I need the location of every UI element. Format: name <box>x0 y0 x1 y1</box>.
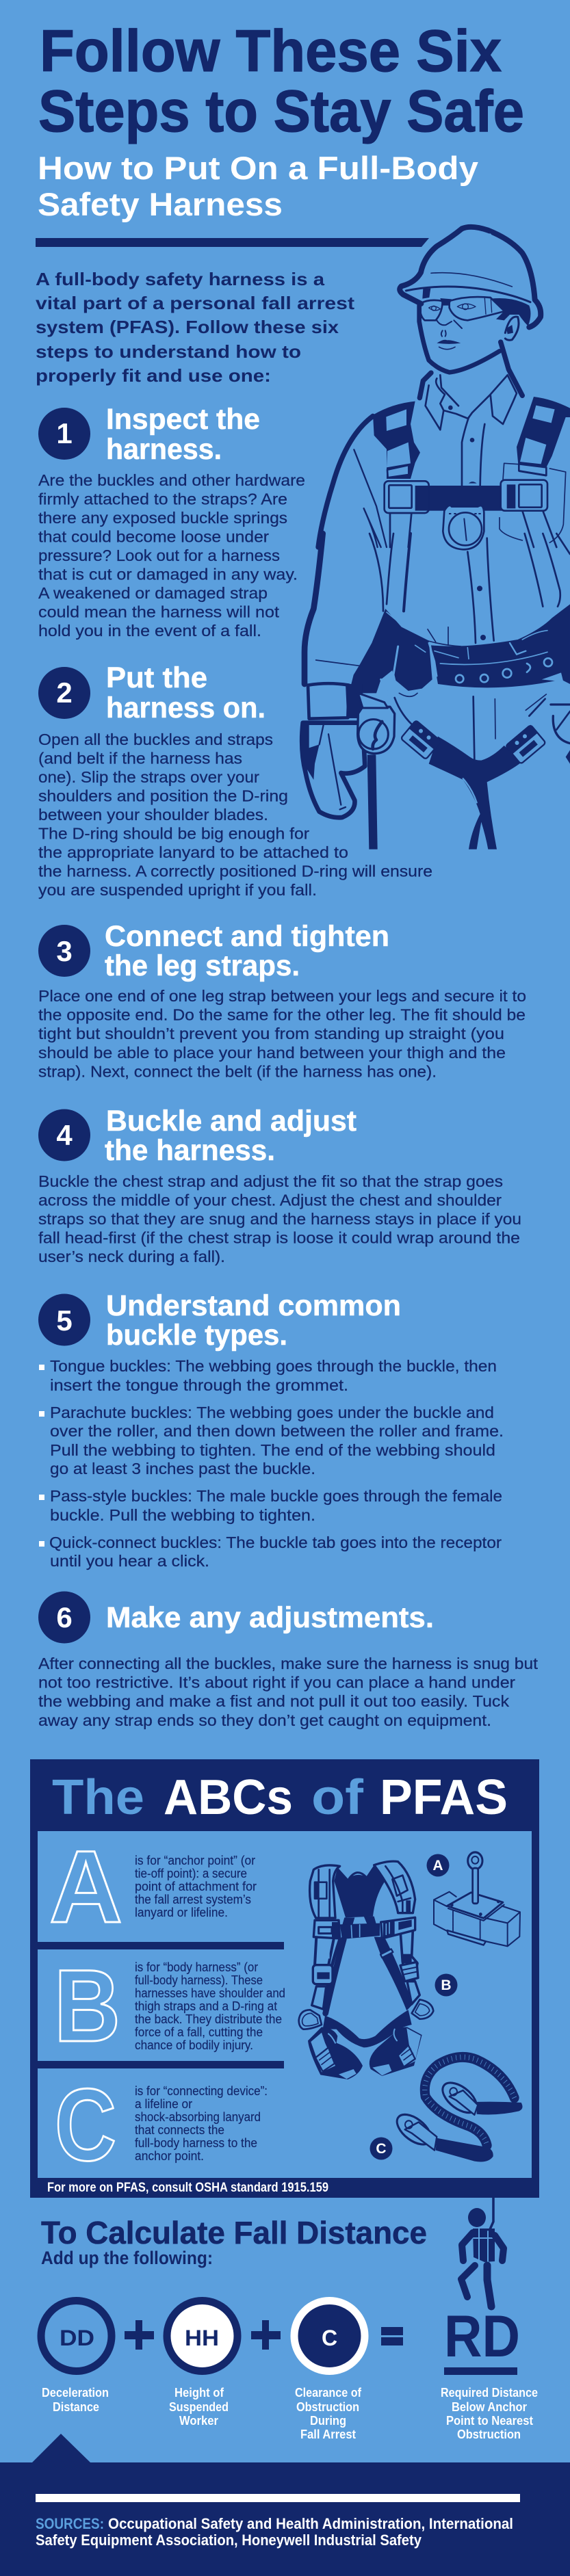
bullet: parachute buckles: Parachute buckles: The webbing goes under the buckle and <box>50 1404 494 1421</box>
bullet: tongue buckles: insert the tongue through the grommet. <box>50 1376 348 1394</box>
step 1 heading: Inspect the <box>106 403 260 436</box>
panel footnote: For more on PFAS, consult OSHA standard 1915.159 <box>47 2181 328 2195</box>
label: deceleration distance: Deceleration <box>42 2386 109 2400</box>
step 3 body text: tight but shouldn’t prevent you from standing up straight (you <box>38 1025 504 1042</box>
badge C: C <box>376 2141 387 2157</box>
intro text: properly fit and use one: <box>36 365 271 386</box>
step 4 body text: user’s neck during a fall). <box>38 1248 225 1265</box>
step 2 body text: Open all the buckles and straps <box>38 731 273 748</box>
B description <box>135 1960 285 2052</box>
label: clearance of obstruction: Obstruction <box>296 2400 359 2414</box>
row divider B/C <box>38 2061 284 2068</box>
label: height of suspended worker <box>169 2386 229 2428</box>
letter B outline: B <box>54 1948 120 2063</box>
step 2 body text: the appropriate lanyard to be attached to <box>38 843 348 861</box>
step 5 heading <box>106 1289 401 1352</box>
intro text: A full-body safety harness is a <box>36 269 325 289</box>
step 3 body text <box>38 987 526 1081</box>
step 1 body text: pressure? Look out for a harness <box>38 547 280 564</box>
illustration: shock-absorbing lanyard <box>392 2057 523 2162</box>
step 1 body text <box>38 471 305 640</box>
step 3 body text: strap). Next, connect the belt (if the harness has one). <box>38 1063 437 1081</box>
step 3 heading: the leg straps. <box>105 949 300 982</box>
label: required distance: Point to Nearest <box>446 2414 533 2428</box>
row divider A/B <box>38 1942 284 1949</box>
bullet: quick-connect buckles: until you hear a click. <box>50 1552 209 1570</box>
subtitle: How to Put On a Full-Body <box>38 150 478 186</box>
bullet: tongue buckles: Tongue buckles: The webbing goes through the buckle, then <box>50 1357 497 1375</box>
panel: the ABCs of PFAS <box>30 1759 539 2198</box>
badge A <box>427 1854 449 1877</box>
step 4 body text <box>38 1172 521 1265</box>
bullet: quick-connect buckles: Quick-connect buckles: The buckle tab goes into the receptor <box>49 1534 502 1551</box>
C description: that connects the <box>135 2123 224 2137</box>
badge B: B <box>441 1977 452 1993</box>
formula: clearance of obstruction <box>294 2301 365 2371</box>
label: height of suspended worker: Worker <box>179 2414 218 2428</box>
formula: height of suspended worker: HH <box>185 2326 219 2350</box>
step 1 body text: there any exposed buckle springs <box>38 509 287 527</box>
B description: chance of bodily injury. <box>135 2038 253 2052</box>
formula: deceleration distance: DD <box>60 2326 94 2350</box>
step 4 body text: fall head-first (if the chest strap is loose it could wrap around the <box>38 1228 520 1246</box>
B description: harnesses have shoulder and <box>135 1986 285 2000</box>
step 2 heading: harness on. <box>106 692 265 724</box>
step 6 heading: Make any adjustments. <box>106 1601 434 1634</box>
step 4 number badge <box>38 1109 90 1161</box>
illustration: full-body harness <box>299 1861 433 2079</box>
B description: is for “body harness” (or <box>135 1960 258 1974</box>
step 2 body text: the harness. A correctly positioned D-ring will ensure <box>38 862 432 880</box>
icon: hanging worker <box>461 2198 504 2306</box>
formula: clearance of obstruction: C <box>322 2326 337 2350</box>
label: height of suspended worker: Height of <box>174 2386 224 2400</box>
panel title: The <box>52 1770 144 1825</box>
title: Follow These Six <box>40 18 502 84</box>
label: height of suspended worker: Suspended <box>169 2400 229 2414</box>
bullet: parachute buckles: over the roller, and then down between the roller and frame. <box>50 1422 504 1440</box>
bullet: parachute buckles: go at least 3 inches past the buckle. <box>50 1460 315 1477</box>
fall distance heading: To Calculate Fall Distance <box>41 2215 427 2250</box>
step 1 body text: Are the buckles and other hardware <box>38 471 305 489</box>
intro text <box>36 269 354 386</box>
illustration: anchor point <box>434 1852 520 1946</box>
step 6 body text: not too restrictive. It’s about right if you can place a hand under <box>38 1673 515 1691</box>
subtitle <box>38 150 478 222</box>
step 3 body text: Place one end of one leg strap between your legs and secure it to <box>38 987 526 1005</box>
step 3 <box>38 920 526 1081</box>
step 6 body text: the webbing and make a fist and not pull it out too easily. Tuck <box>38 1692 510 1710</box>
step 1 body text: firmly attached to the straps? Are <box>38 490 287 508</box>
C description: full-body harness to the <box>135 2136 257 2150</box>
subtitle: Safety Harness <box>38 186 283 222</box>
A description: point of attachment for <box>135 1880 257 1893</box>
step 3 body text: should be able to place your hand between your thigh and the <box>38 1044 506 1062</box>
step 1 body text: could mean the harness will not <box>38 603 280 621</box>
step 4 heading <box>105 1105 357 1167</box>
step 1 number badge <box>38 408 90 460</box>
sources <box>36 2515 513 2549</box>
equals sign <box>381 2327 403 2345</box>
footer rule <box>36 2494 520 2502</box>
bullet: parachute buckles: Pull the webbing to tighten. The end of the webbing should <box>50 1441 495 1459</box>
title rule <box>36 238 429 247</box>
step 2 heading <box>106 661 265 724</box>
label: deceleration distance: Distance <box>53 2400 99 2414</box>
bullet: quick-connect buckles <box>39 1534 502 1570</box>
step 2 <box>38 661 432 899</box>
bullet: pass-style buckles <box>39 1487 502 1524</box>
label: required distance: Obstruction <box>457 2428 521 2441</box>
step 2 heading: Put the <box>106 661 207 694</box>
step 3 body text: the opposite end. Do the same for the other leg. The fit should be <box>38 1006 526 1023</box>
step 5 number badge <box>38 1294 90 1346</box>
bullet: parachute buckles <box>39 1404 504 1477</box>
bullet: tongue buckles <box>39 1357 497 1394</box>
B description: the back. They distribute the <box>135 2012 282 2026</box>
step 1 heading <box>106 403 260 466</box>
step 1 body text: A weakened or damaged strap <box>38 584 268 602</box>
label: clearance of obstruction: During <box>310 2414 346 2428</box>
step 6 <box>38 1591 539 1729</box>
step 3 number badge: 3 <box>56 935 73 967</box>
A description: tie-off point): a secure <box>135 1867 247 1880</box>
B description: force of a fall, cutting the <box>135 2025 263 2039</box>
A description: the fall arrest system’s <box>135 1893 251 1906</box>
formula: deceleration distance <box>41 2301 112 2371</box>
badge C <box>370 2137 393 2160</box>
step 5 <box>38 1289 504 1570</box>
intro text: steps to understand how to <box>36 341 301 362</box>
step 1 heading: harness. <box>106 433 222 466</box>
step 4 heading: the harness. <box>105 1134 275 1167</box>
panel title <box>52 1770 508 1825</box>
plus sign <box>125 2320 154 2350</box>
step 2 body text: (and belt if the harness has <box>38 750 242 767</box>
bullet: pass-style buckles: Pass-style buckles: The male buckle goes through the female <box>50 1487 502 1505</box>
step 2 number badge <box>38 667 90 719</box>
step 1 body text: that could become loose under <box>38 528 269 546</box>
bullet: pass-style buckles: buckle. Pull the webbing to tighten. <box>50 1506 315 1524</box>
step 6 number badge <box>38 1591 90 1643</box>
step 2 number badge: 2 <box>56 676 73 709</box>
fall distance subheading: Add up the following: <box>41 2248 213 2268</box>
step 3 number badge <box>38 925 90 977</box>
step 5 bullet list <box>39 1357 504 1570</box>
sources: Occupational Safety and Health Administration, International <box>108 2515 513 2532</box>
title <box>38 18 524 144</box>
intro text: vital part of a personal fall arrest <box>36 293 354 313</box>
step 4 <box>38 1105 521 1265</box>
step 5 heading: buckle types. <box>106 1319 287 1352</box>
step 1 number badge: 1 <box>56 417 73 449</box>
step 5 number badge: 5 <box>56 1304 73 1337</box>
sources: Safety Equipment Association, Honeywell Industrial Safety <box>36 2532 422 2549</box>
step 5 heading: Understand common <box>106 1289 401 1322</box>
step 3 heading: Connect and tighten <box>105 920 389 953</box>
label: required distance <box>441 2386 538 2441</box>
step 4 body text: straps so that they are snug and the harness stays in place if you <box>38 1210 521 1228</box>
step 6 body text: After connecting all the buckles, make sure the harness is snug but <box>38 1655 539 1672</box>
step 4 heading: Buckle and adjust <box>106 1105 357 1138</box>
step 1 body text: hold you in the event of a fall. <box>38 622 261 640</box>
step 6 body text <box>38 1655 539 1729</box>
A description <box>135 1854 257 1919</box>
formula: required distance: RD <box>444 2304 520 2369</box>
step 2 body text <box>38 731 432 899</box>
step 2 body text: one). Slip the straps over your <box>38 768 259 786</box>
step 1 <box>38 403 305 640</box>
letter A outline: A <box>49 1829 122 1944</box>
title: Steps to Stay Safe <box>38 79 524 144</box>
label: required distance: Below Anchor <box>452 2400 527 2414</box>
C description: anchor point. <box>135 2149 204 2163</box>
B description: full-body harness). These <box>135 1973 263 1987</box>
label: clearance of obstruction: Fall Arrest <box>300 2428 356 2441</box>
label: clearance of obstruction <box>295 2386 362 2441</box>
panel frame <box>30 1759 539 2198</box>
A description: lanyard or lifeline. <box>135 1906 228 1919</box>
formula: height of suspended worker <box>167 2301 237 2371</box>
step 2 body text: shoulders and position the D-ring <box>38 787 288 804</box>
step 6 body text: away any strap ends so they don’t get caught on equipment. <box>38 1711 491 1729</box>
step 2 body text: between your shoulder blades. <box>38 806 268 824</box>
illustration: worker wearing a full-body harness <box>301 227 570 850</box>
panel title: ABCs <box>164 1770 293 1825</box>
plus sign <box>251 2320 281 2350</box>
step 4 body text: across the middle of your chest. Adjust the chest and shoulder <box>38 1192 502 1209</box>
sources: SOURCES: <box>36 2515 104 2532</box>
intro text: system (PFAS). Follow these six <box>36 317 339 337</box>
C description: is for “connecting device”: <box>135 2084 268 2098</box>
C description <box>135 2084 268 2163</box>
badge B <box>435 1974 457 1996</box>
A description: is for “anchor point” (or <box>135 1854 255 1867</box>
B description: thigh straps and a D-ring at <box>135 1999 277 2013</box>
label: deceleration distance <box>42 2386 109 2414</box>
panel title: PFAS <box>380 1770 508 1825</box>
step 4 body text: Buckle the chest strap and adjust the fit so that the strap goes <box>38 1172 503 1190</box>
label: required distance: Required Distance <box>441 2386 538 2400</box>
step 2 body text: you are suspended upright if you fall. <box>38 881 317 899</box>
footer band with pointer <box>0 2434 570 2576</box>
C description: shock-absorbing lanyard <box>135 2110 261 2124</box>
label: clearance of obstruction: Clearance of <box>295 2386 362 2400</box>
step 1 body text: that is cut or damaged in any way. <box>38 565 298 583</box>
panel title: of <box>311 1770 364 1825</box>
step 2 body text: The D-ring should be big enough for <box>38 825 309 843</box>
step 4 number badge: 4 <box>56 1119 73 1151</box>
step 3 heading <box>105 920 389 982</box>
step 6 number badge: 6 <box>56 1601 73 1633</box>
letter C outline: C <box>55 2067 116 2182</box>
C description: a lifeline or <box>135 2097 192 2111</box>
badge A: A <box>432 1858 443 1874</box>
